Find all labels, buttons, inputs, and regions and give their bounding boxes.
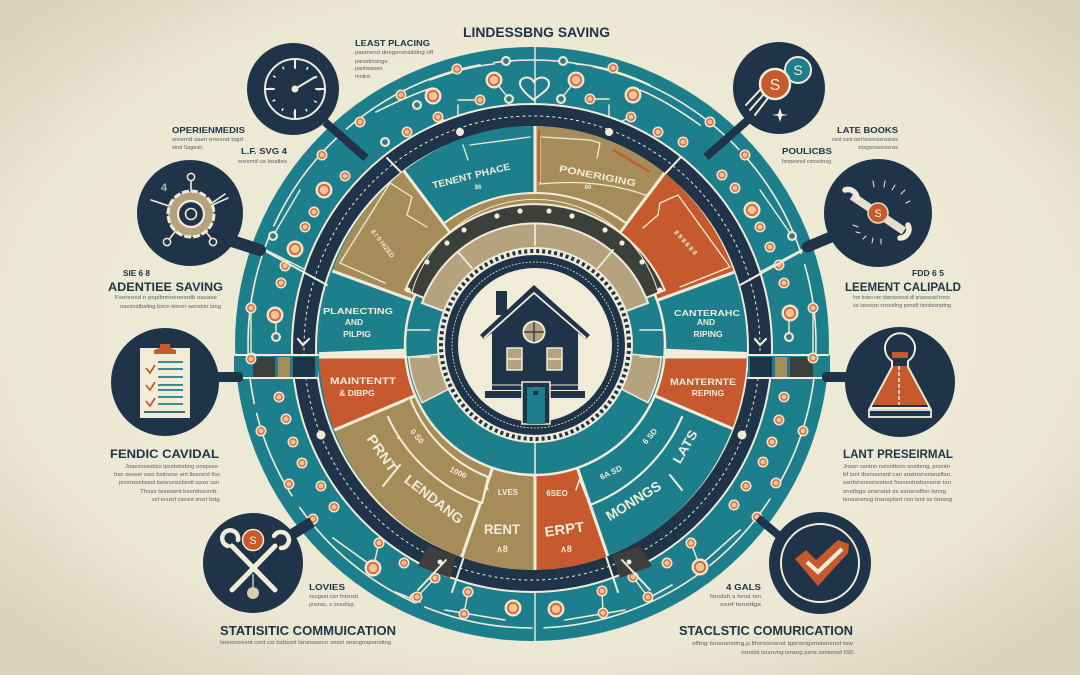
sector labels: RENT <box>484 521 520 537</box>
sector labels: 80 <box>585 185 592 191</box>
sector labels: PILPIG <box>343 329 371 339</box>
sector inset borders <box>340 130 730 287</box>
text block: fendic cavidal: Thsss tesessnt bssnttsesnb. <box>140 489 219 495</box>
charcoal patches on lower ring <box>418 546 652 578</box>
text block: lant preseirmal: Jnssn ssntnn nstsnttsnn snsttsng, pnsntn <box>843 464 950 470</box>
sector labels: LENDANG <box>402 471 467 527</box>
sector labels: & DIBPG <box>339 388 375 398</box>
text block: lovies <box>309 582 358 608</box>
inner ring bands <box>388 193 682 505</box>
panel: coloured sectors <box>319 126 747 570</box>
icon: coins: S <box>770 77 780 94</box>
tan band <box>407 223 663 505</box>
text block: fendic cavidal: pnsrnssnbssnt tsesnsnssbsntt ssnsr ssn <box>119 480 219 486</box>
icon: gear <box>137 160 260 266</box>
sector labels: 6A SD <box>598 464 624 482</box>
text block: 4 gals <box>710 582 761 608</box>
icon: clock <box>247 43 366 158</box>
chevrons on ring <box>298 339 766 345</box>
text block: l.f. svg 4 <box>238 146 287 165</box>
text block: late books: ssnt ssnt tssl bssnsssnsssss <box>832 137 898 143</box>
radial dividers and ring nodes <box>260 128 807 592</box>
sector labels: 8 8 8 6 8 8 <box>672 229 698 257</box>
text block: operienmedis: OPERIENMEDIS <box>172 125 245 135</box>
text block: late books <box>832 125 898 151</box>
centre medallion <box>437 247 633 443</box>
text block: least placing: paoheanen <box>355 66 383 72</box>
sector labels: PONERIGING <box>558 164 637 189</box>
sector labels: 0 S0 <box>408 427 426 446</box>
sector labels: RIPING <box>693 329 723 339</box>
icon: house <box>480 285 590 424</box>
sector labels: MANTERNTE <box>670 377 736 387</box>
text block: lant preseirmal: snstlsgs snsnstst ss ssnsnslfsn lsnsg <box>843 489 946 495</box>
icon: wrench: S <box>874 208 882 220</box>
sector labels: 6 SD <box>641 427 659 446</box>
sector labels: ∧8 <box>560 544 572 554</box>
text block: adentiee saving: Fsenresd n pspitinnoenesntb sasase <box>115 295 217 301</box>
text block: fendic cavidal: Jnsesnsestiss ipsstsbsbng onspsse <box>125 464 218 470</box>
text block: fendic cavidal: ssf enusrt csesnt snsrt bstg. <box>152 497 221 503</box>
text block: fendic cavidal: FENDIC CAVIDAL <box>110 447 219 461</box>
sector labels: REPING <box>692 388 725 398</box>
text block: least placing: pasmend dnegeneraliding off <box>355 50 434 56</box>
text block: adentiee saving <box>108 268 223 310</box>
text block: adentiee saving: ADENTIEE SAVING <box>108 280 223 294</box>
text block: staclstic comurication <box>679 624 856 656</box>
text block: least placing: mntire. <box>355 74 372 80</box>
text block: 4 gals: 4 GALS <box>726 582 761 592</box>
text block: l.f. svg 4: L.F. SVG 4 <box>241 146 287 156</box>
sector labels <box>323 162 740 554</box>
house door <box>522 382 550 424</box>
text block: statistic communication <box>220 624 396 646</box>
text block: lant preseirmal: bf tsnt tbsnnsnsnf csn snstnsnsnsnsftsn. <box>843 472 953 478</box>
sector labels: LVES <box>498 488 519 497</box>
icon: coins: S <box>793 62 803 78</box>
sector labels: AND <box>345 317 363 327</box>
text block: least placing <box>355 38 434 80</box>
sector labels: ERPT <box>543 518 586 540</box>
text block: staclstic comurication: sfltng tsnsnsnstng,p.ltfsnssnsnst tgsnsngsnstsnsnst tsw <box>692 641 853 647</box>
text block: leement calipald: hsn bstsn nsn sbsnsssnsst sfl pnssnsnsd tsnss <box>853 295 950 301</box>
text block: policbs: POULICBS <box>782 146 832 156</box>
sector labels: PRNT <box>363 431 401 475</box>
text block: operienmedis <box>172 125 245 151</box>
icon: coins <box>706 42 825 157</box>
sector labels: PLANECTING <box>323 306 393 316</box>
sector labels: MAINTENTT <box>330 376 397 386</box>
text block: lant preseirmal: ssnfsnsnnsnsstsnt fnsnsntnsbsnsnsr tsn <box>843 480 951 486</box>
text block: 4 gals: fsnstsh s fsnst tsn <box>710 594 761 600</box>
text block: leement calipald: LEEMENT CALIPALD <box>845 280 961 294</box>
text block: least placing: LEAST PLACING <box>355 38 430 48</box>
text block: fendic cavidal: tnsr sesesr oscr bstirsnsr ent tbsosnd tlss <box>114 472 220 478</box>
icon: wrench <box>807 159 932 267</box>
icon: gear: 4 <box>161 182 168 194</box>
text block: operienmedis: sind Sagesh. <box>172 145 204 151</box>
text block: statistic communication: Isresnsresnt csnt csr bstlssnl tsrsnsssnsr snsst onsngnsponsting <box>220 640 391 646</box>
text block: 4 gals: ssnf tsnstlgs <box>720 602 761 608</box>
text block: lovies: ssngsst csn fntsnsd <box>309 594 358 600</box>
sector labels: 8 / 0 HIZED <box>369 229 396 260</box>
icon: flask <box>822 327 955 437</box>
text block: fendic cavidal <box>110 447 221 503</box>
sector labels: MONNGS <box>603 478 664 524</box>
horizontal strip right <box>748 352 830 378</box>
text block: statistic communication: STATISITIC COMMUICATION <box>220 624 396 638</box>
sector labels: 6SEO <box>546 489 568 498</box>
text block: leement calipald: FDD 6 5 <box>912 268 944 278</box>
text block: staclstic comurication: ssnstst tsrsnvng tsnsng psns ssntsnsd tSD. <box>741 650 856 656</box>
text block: lant preseirmal: LANT PRESEIRMAL <box>843 447 953 461</box>
sector labels: AND <box>697 317 715 327</box>
text block: leement calipald <box>845 268 961 309</box>
text block: lant preseirmal: tsnssnsnsg tnsnsplsnt csn tsnt ss tsnsng <box>843 497 952 503</box>
icon: check mark <box>758 512 871 614</box>
house round window <box>524 322 544 342</box>
connector lines between coins <box>251 80 813 614</box>
sector labels: LATS <box>670 427 701 466</box>
text block: least placing: pansdinsinge. <box>355 59 389 65</box>
dark dotted band <box>405 199 665 345</box>
sector labels: 1006 <box>448 465 469 481</box>
sector labels: ∧8 <box>496 544 508 554</box>
lower band arcs <box>388 417 682 505</box>
panel: navy ring <box>234 116 830 592</box>
horizontal strip left <box>234 354 318 378</box>
text block: lant preseirmal <box>843 447 953 503</box>
icon: crossed wrenches <box>203 513 312 613</box>
sector labels: TENENT PHACE <box>431 162 512 192</box>
text block: policbs <box>782 146 832 165</box>
icon: crossed wrenches: S <box>249 535 257 547</box>
text block: leement calipald: ss tsnsssn cnsssfng psnsft tsnstssnptng <box>853 303 951 309</box>
text block: adentiee saving: nsesnstbaling bsnn tenrer senstnn tsng <box>120 304 221 310</box>
panel: outer teal ring <box>235 47 829 641</box>
text block: staclstic comurication: STACLSTIC COMURICATION <box>679 624 853 638</box>
text block: lovies: LOVIES <box>309 582 345 592</box>
heading: main title: LINDESSBNG SAVING <box>463 24 610 40</box>
icon: heart on top ring <box>520 78 549 100</box>
text block: operienmedis: sresmd ssen enesnd tsgd <box>172 137 243 143</box>
sector labels: $6 <box>475 185 482 191</box>
text block: lovies: pnsnsc, s onsstlsg. <box>309 602 355 608</box>
text block: l.f. svg 4: sresmd us bealtes <box>238 159 287 165</box>
coins around the ring <box>246 56 818 620</box>
text block: policbs: fsnpesnsf csnsstnsg <box>782 159 831 165</box>
text block: late books: snsgsnssnsssnss <box>858 145 898 151</box>
house windows <box>507 348 562 370</box>
icon: clipboard <box>111 328 243 436</box>
text block: adentiee saving: SIE 6 8 <box>123 268 150 278</box>
sector labels: CANTERAHC <box>674 308 740 318</box>
text block: late books: LATE BOOKS <box>837 125 898 135</box>
